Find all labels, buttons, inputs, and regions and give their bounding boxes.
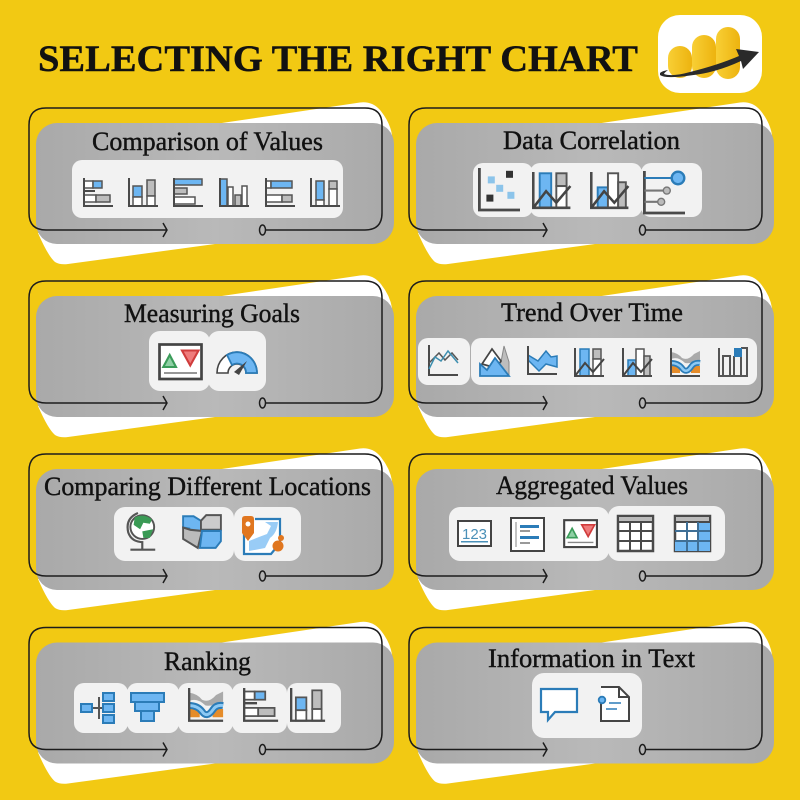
heading: aggregated values: Aggregated Values <box>496 471 688 500</box>
panel: ranking <box>29 622 394 784</box>
heading: data correlation: Data Correlation <box>503 126 680 155</box>
title: SELECTING THE RIGHT CHART <box>38 39 638 80</box>
heading: comparing different locations: Comparing Different Locations <box>44 472 371 501</box>
icon group: correlation charts <box>473 163 702 217</box>
panel: data correlation <box>409 102 774 264</box>
heading: ranking: Ranking <box>164 647 251 676</box>
panel: comparison of values <box>29 102 394 264</box>
icon: logo with bars and rising arrow <box>658 15 762 93</box>
heading: trend over time: Trend Over Time <box>501 298 683 327</box>
icon group: aggregate visuals <box>449 506 725 561</box>
icon group: comparison charts <box>72 160 343 218</box>
icon group: text visuals <box>532 673 642 738</box>
icon group: aggregate visuals: 123 <box>462 526 487 543</box>
icon group: map charts <box>114 507 301 561</box>
heading: comparison of values: Comparison of Values <box>92 127 323 156</box>
panel: aggregated values <box>409 448 774 610</box>
panel: trend over time <box>409 275 774 437</box>
icon group: goal charts <box>149 331 266 391</box>
icon group: ranking charts <box>74 683 341 733</box>
heading: information in text: Information in Text <box>488 644 696 673</box>
heading: measuring goals: Measuring Goals <box>124 299 300 328</box>
panel: comparing different locations <box>29 448 394 610</box>
icon group: trend charts <box>418 338 757 385</box>
panel: measuring goals <box>29 275 394 437</box>
panel: information in text <box>409 622 774 784</box>
